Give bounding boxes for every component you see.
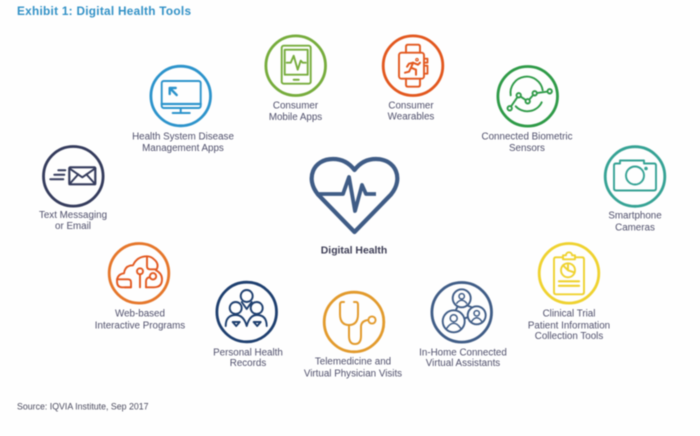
label <box>304 356 402 380</box>
label <box>388 100 434 122</box>
icon: stethoscope <box>324 292 384 352</box>
label: Health System Disease <box>132 132 234 142</box>
label: Interactive Programs <box>95 320 185 332</box>
label <box>213 348 283 369</box>
icon: connected people network <box>432 282 492 342</box>
icon: camera <box>605 147 665 206</box>
icon: clipboard with pie chart <box>539 243 599 303</box>
label: Patient Information <box>528 320 610 332</box>
label: Consumer <box>273 100 319 112</box>
title: Exhibit 1: Digital Health Tools <box>17 4 191 18</box>
label: Cameras <box>615 222 655 234</box>
label: Smartphone <box>608 210 662 222</box>
label: Records <box>230 358 266 369</box>
label <box>482 132 573 154</box>
item: Health System Disease Management Apps <box>132 66 234 154</box>
icon: desktop monitor with cursor <box>151 66 210 126</box>
icon: three people with hearts <box>217 282 276 342</box>
label: Connected Biometric <box>482 132 573 142</box>
label: Clinical Trial <box>543 308 595 320</box>
icon: smartwatch with runner <box>383 36 443 96</box>
source note: Source: IQVIA Institute, Sep 2017 <box>17 402 149 412</box>
label: Personal Health <box>213 348 283 358</box>
label: Virtual Physician Visits <box>304 368 402 380</box>
item: In-Home Connected Virtual Assistants <box>419 282 507 369</box>
label <box>608 210 662 234</box>
item: Consumer Wearables <box>383 36 443 123</box>
icon: tablet with pulse <box>266 36 326 96</box>
label <box>419 348 507 369</box>
item: Text Messaging or Email <box>39 146 107 232</box>
label: In-Home Connected <box>419 348 507 358</box>
item: Telemedicine and Virtual Physician Visits <box>304 292 402 380</box>
label <box>39 210 107 232</box>
item: Consumer Mobile Apps <box>266 36 326 123</box>
item: Connected Biometric Sensors <box>482 66 573 154</box>
label: Collection Tools <box>535 331 603 342</box>
central heart icon: Digital Health <box>312 159 397 232</box>
icon: sensor line chart <box>498 66 558 126</box>
label: or Email <box>55 221 91 232</box>
label: Mobile Apps <box>269 112 322 123</box>
label <box>95 308 185 332</box>
label <box>269 100 322 123</box>
label: Wearables <box>388 112 434 122</box>
item: Personal Health Records <box>213 282 283 369</box>
label: Virtual Assistants <box>426 358 500 369</box>
label: Management Apps <box>142 143 224 154</box>
label <box>528 308 610 342</box>
label <box>132 132 234 154</box>
label: Digital Health: Digital Health <box>321 246 387 256</box>
item: Clinical Trial Patient Information Collection Tools <box>528 243 610 342</box>
icon: cloud with circuit <box>109 243 169 303</box>
icon: envelope with speed lines <box>44 146 103 206</box>
label: Text Messaging <box>39 210 107 221</box>
item: Smartphone Cameras <box>605 147 665 234</box>
label: Telemedicine and <box>315 356 391 368</box>
label: Web-based <box>115 308 165 320</box>
label: Sensors <box>509 143 545 154</box>
label: Consumer <box>388 100 434 112</box>
item: Web-based Interactive Programs <box>95 243 185 332</box>
